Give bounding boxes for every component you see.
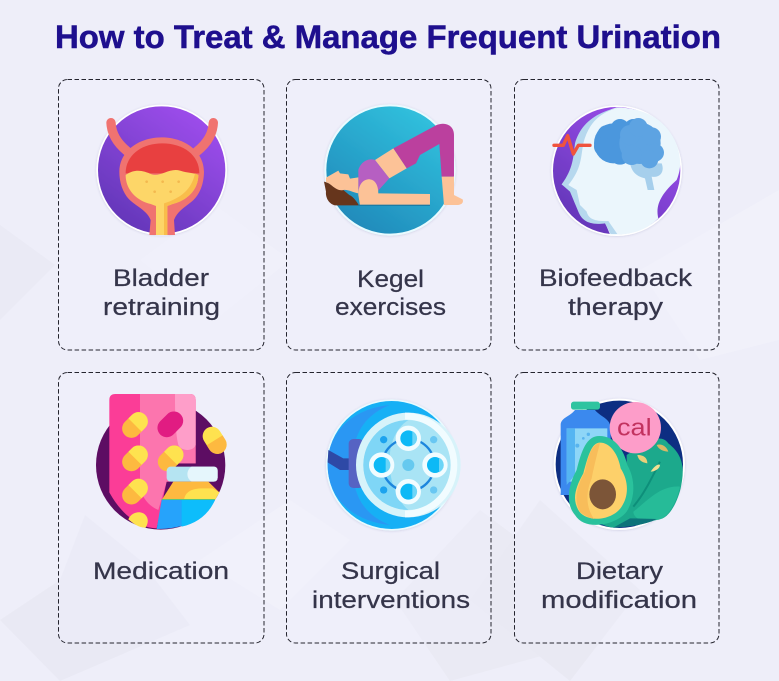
icon: bridge pose (324, 104, 463, 236)
title: How to Treat & Manage Frequent Urination (55, 19, 721, 55)
label: therapy (568, 294, 663, 321)
label (539, 265, 693, 321)
panel: biofeedback therapy (514, 80, 719, 350)
panel: dietary modification (514, 372, 719, 643)
label: Medication (93, 558, 229, 585)
label: Dietary (576, 558, 663, 585)
icon: pills (96, 394, 230, 530)
panel: medication (58, 372, 264, 643)
label: Bladder (113, 265, 209, 292)
icon: head and brain (551, 105, 682, 236)
label: retraining (103, 294, 220, 321)
icon: avocado, bottle, greens: cal (617, 415, 652, 442)
icon: bladder (96, 105, 227, 235)
icon: avocado, bottle, greens (554, 399, 685, 530)
label: modification (541, 587, 697, 614)
label: Surgical (341, 558, 440, 585)
panel: bladder retraining (58, 80, 264, 350)
label: interventions (312, 587, 470, 614)
panel: kegel exercises (286, 80, 491, 350)
label: Kegel (357, 266, 424, 293)
icon: surgical device (326, 399, 461, 531)
label (335, 266, 446, 321)
label (312, 558, 470, 614)
label: exercises (335, 294, 446, 321)
label: Biofeedback (539, 265, 693, 292)
panel: surgical interventions (286, 372, 491, 643)
label (541, 558, 697, 614)
label (103, 265, 220, 321)
